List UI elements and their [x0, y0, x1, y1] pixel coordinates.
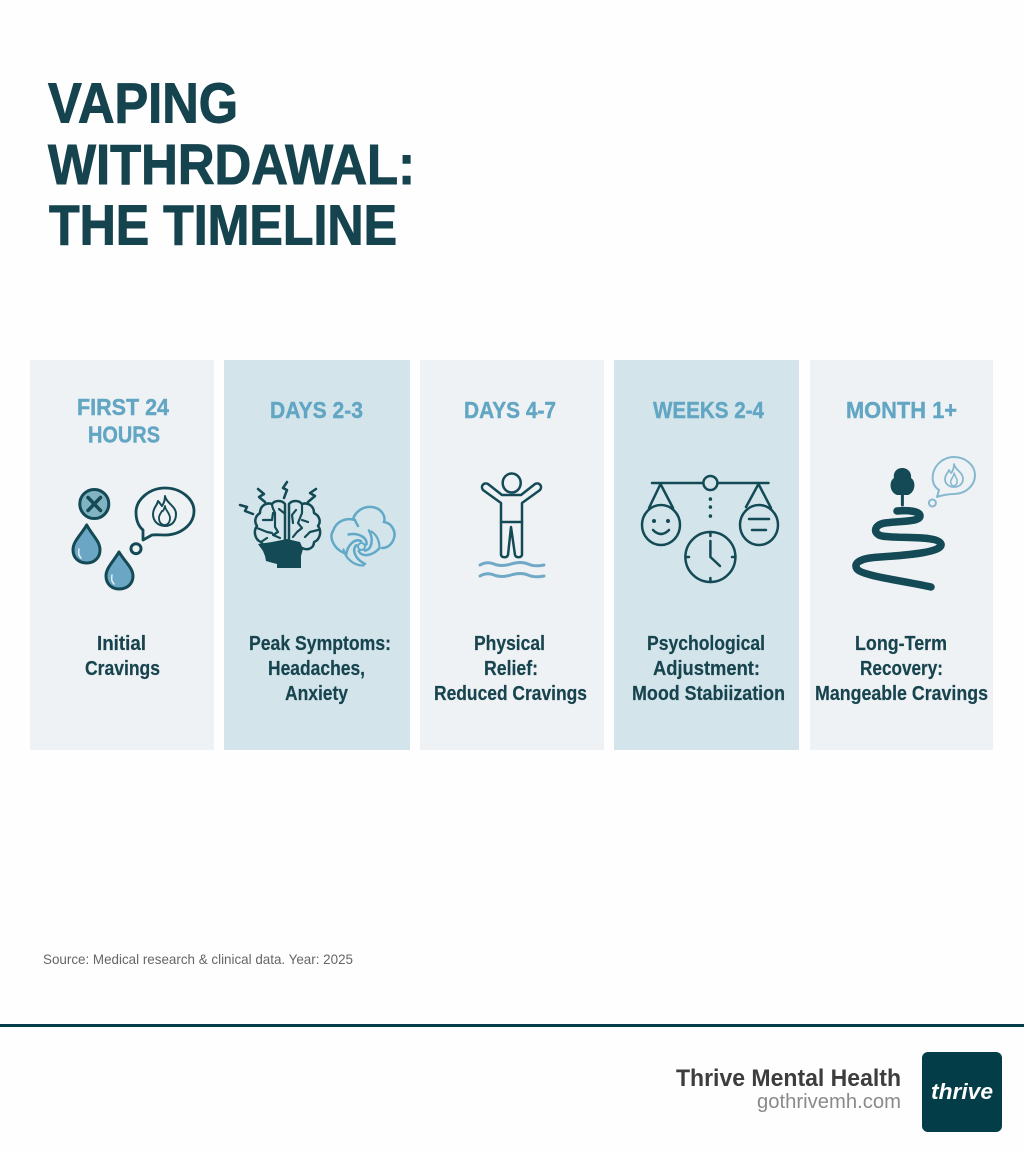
label: initial cravings: [85, 633, 160, 680]
label: peak symptoms: [249, 633, 391, 705]
label: long-term recovery: Mangeable Cravings: [815, 683, 988, 705]
heading: days 2-3: DAYS 2-3: [270, 397, 363, 423]
label: physical relief: [434, 633, 587, 705]
label: physical relief: Reduced Cravings: [434, 683, 587, 705]
icon: winding road with tree and bubble: [856, 457, 975, 587]
title: VAPING: [48, 72, 238, 136]
icon: brain with head and lightning: [240, 482, 320, 568]
icon: person above waves: [480, 474, 544, 577]
heading: first 24 hours: HOURS: [88, 422, 160, 448]
label: peak symptoms: Headaches,: [268, 658, 365, 680]
footer brand text: [676, 1065, 901, 1113]
panel: month 1+: [810, 360, 993, 750]
panel: first 24 hours: [30, 360, 214, 750]
label: long-term recovery: [815, 633, 988, 705]
label: initial cravings: Cravings: [85, 658, 160, 680]
title: WITHRDAWAL:: [48, 133, 415, 197]
label: initial cravings: Initial: [97, 633, 146, 655]
heading: days 4-7: DAYS 4-7: [464, 397, 556, 423]
label: psychological adjustment: Psychological: [647, 633, 765, 655]
label: psychological adjustment: [632, 633, 785, 705]
label: long-term recovery: Long-Term: [855, 633, 947, 655]
title: THE TIMELINE: [49, 194, 397, 258]
heading: month 1+: MONTH 1+: [846, 397, 957, 423]
label: physical relief: Physical: [474, 633, 545, 655]
icon: cravings, drops and flame bubble: [73, 488, 194, 589]
label: psychological adjustment: Adjustment:: [653, 658, 760, 680]
source note: Source: Medical research & clinical data. Year: 2025: [43, 951, 353, 967]
logo: thrive: [931, 1079, 993, 1104]
logo: [922, 1052, 1002, 1132]
footer rule: [0, 1024, 1024, 1027]
heading: weeks 2-4: WEEKS 2-4: [653, 397, 764, 423]
panel: days 4-7: [420, 360, 604, 750]
heading: first 24 hours: [77, 394, 169, 448]
label: psychological adjustment: Mood Stabiization: [632, 683, 785, 705]
label: long-term recovery: Recovery:: [860, 658, 943, 680]
icon: balance scale with faces and clock: [642, 476, 778, 582]
footer brand text: Thrive Mental Health: [676, 1065, 901, 1092]
footer brand text: gothrivemh.com: [757, 1091, 901, 1113]
label: peak symptoms: Anxiety: [285, 683, 349, 705]
icon: cloud with spiral: [331, 507, 395, 566]
title: [48, 72, 415, 258]
label: peak symptoms: Peak Symptoms:: [249, 633, 391, 655]
heading: first 24 hours: FIRST 24: [77, 394, 169, 420]
panel: days 2-3: [224, 360, 410, 750]
panel: weeks 2-4: [614, 360, 799, 750]
label: physical relief: Relief:: [484, 658, 538, 680]
